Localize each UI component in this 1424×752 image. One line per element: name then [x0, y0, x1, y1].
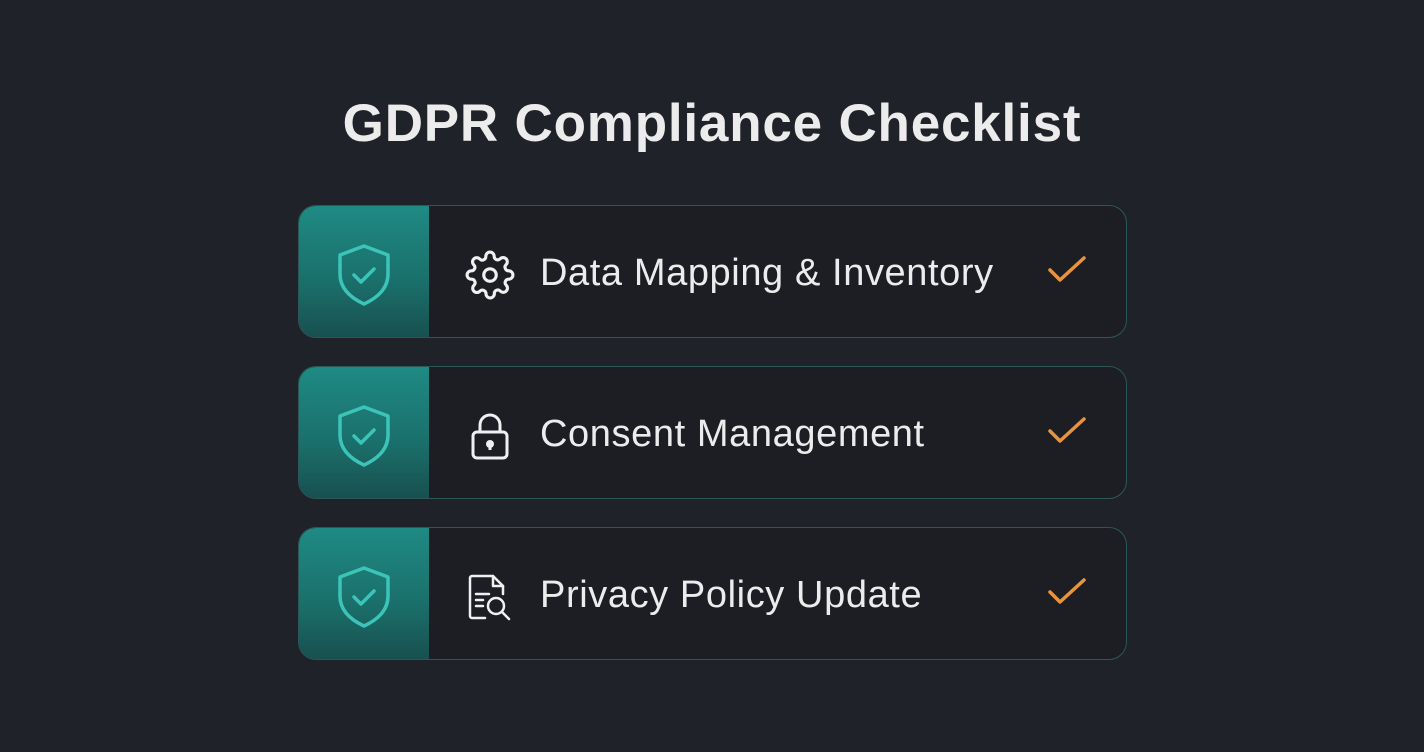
teal tab with shield icon — [299, 528, 429, 659]
teal tab with shield icon — [299, 206, 429, 337]
label: Consent Management — [540, 413, 925, 455]
check mark — [1048, 256, 1086, 282]
teal tab with shield icon — [299, 367, 429, 498]
card: data mapping — [298, 205, 1127, 338]
label: Privacy Policy Update — [540, 574, 922, 616]
icon: lock — [472, 414, 508, 460]
icon: document search — [468, 574, 510, 620]
check mark — [1048, 417, 1086, 443]
label: Data Mapping & Inventory — [540, 252, 994, 294]
card: privacy policy — [298, 527, 1127, 660]
icon: gear — [466, 250, 514, 300]
title: GDPR Compliance Checklist — [343, 94, 1081, 153]
check mark — [1048, 578, 1086, 604]
card: consent — [298, 366, 1127, 499]
